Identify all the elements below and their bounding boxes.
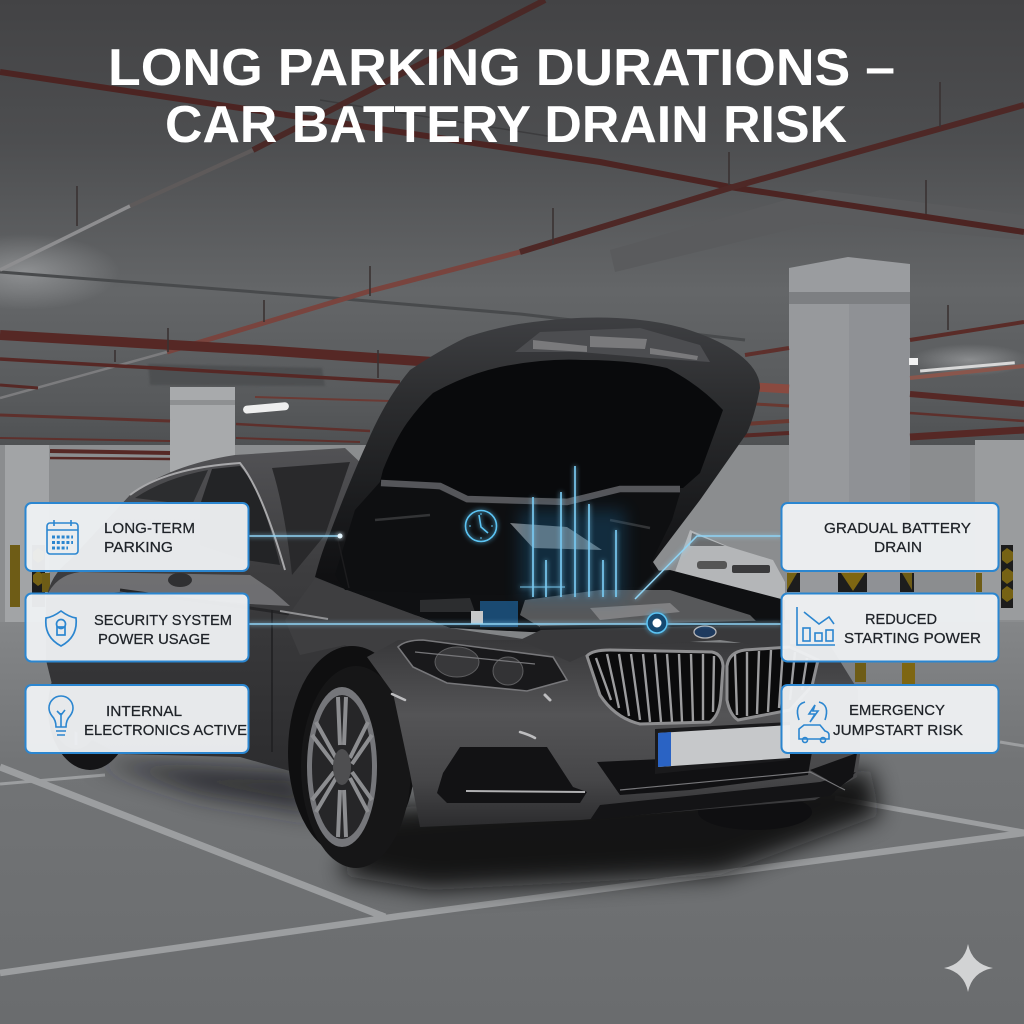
hood latch area [515, 328, 710, 362]
label [833, 702, 963, 739]
title: LONG PARKING DURATIONS – [108, 39, 895, 97]
lower lip [590, 772, 856, 820]
ceiling pipes [0, 0, 1024, 459]
label: ELECTRONICS ACTIVE [84, 722, 247, 739]
label: GRADUAL BATTERY [824, 520, 971, 537]
ceiling lights [243, 358, 1015, 414]
panel: reduced starting power [782, 594, 998, 662]
hood brace [381, 483, 680, 502]
hood lip [520, 624, 790, 662]
hood latch bars [533, 336, 698, 360]
label: LONG-TERM [104, 520, 195, 537]
icon: declining bar chart [797, 607, 835, 645]
label: JUMPSTART RISK [833, 722, 963, 739]
connection dot [338, 534, 342, 538]
far front wheel [698, 794, 812, 830]
lower hood inner [335, 482, 680, 595]
label [84, 703, 247, 739]
hologram glow backdrop [520, 510, 625, 600]
license plate [655, 722, 790, 774]
engine bay [315, 570, 785, 640]
fog light intake [437, 747, 587, 803]
floor parking lines [0, 742, 1024, 973]
label [824, 520, 971, 556]
front wheel arch [288, 646, 416, 858]
car side body [46, 448, 420, 790]
side windows [135, 470, 208, 505]
title [108, 39, 895, 154]
car shadow [340, 770, 880, 890]
fender top [285, 578, 530, 660]
front wheel [301, 666, 411, 868]
icon: lightning bolt and car [797, 702, 829, 742]
label: POWER USAGE [98, 631, 210, 648]
label: INTERNAL [106, 703, 182, 720]
panel: gradual battery drain [782, 503, 998, 571]
lower grille under plate [597, 752, 812, 795]
panel: security system power usage [26, 594, 248, 662]
label [104, 520, 195, 556]
label: SECURITY SYSTEM [94, 612, 232, 629]
icon: shield with lock [46, 611, 76, 646]
panel: emergency jumpstart risk [782, 685, 998, 753]
windshield reflection [510, 523, 602, 550]
door shadow [90, 760, 320, 815]
holographic battery bars [520, 466, 616, 597]
panel: internal electronics active [26, 685, 248, 753]
title: CAR BATTERY DRAIN RISK [165, 96, 847, 154]
rear wheel [48, 646, 132, 770]
icon: glowing connection node [647, 613, 667, 633]
kidney grille [587, 647, 818, 724]
background parked car [672, 530, 785, 612]
label: STARTING POWER [844, 630, 981, 647]
hazard stripes on pillars [10, 545, 1013, 684]
label: DRAIN [874, 539, 922, 556]
right intake [810, 753, 857, 787]
hood strut [338, 540, 349, 588]
headlight [398, 640, 567, 691]
label: PARKING [104, 539, 173, 556]
label: EMERGENCY [849, 702, 945, 719]
icon: corner sparkle [944, 944, 993, 992]
BMW badge [694, 626, 716, 638]
icon: glowing clock [466, 510, 496, 542]
label [844, 611, 981, 647]
open hood frame [315, 318, 760, 590]
icon: light bulb [49, 696, 73, 735]
car with open hood [46, 318, 880, 890]
label [94, 612, 232, 648]
hood insulation pad [380, 360, 723, 498]
callout connector lines [248, 536, 781, 624]
front bumper [367, 640, 860, 827]
window chrome trim [130, 463, 285, 570]
label: REDUCED [865, 611, 937, 628]
door shoulder reflection [46, 572, 290, 606]
icon: calendar [47, 520, 78, 554]
panel: long-term parking [26, 503, 248, 571]
bumper highlights [392, 694, 550, 738]
side mirror [168, 573, 192, 587]
